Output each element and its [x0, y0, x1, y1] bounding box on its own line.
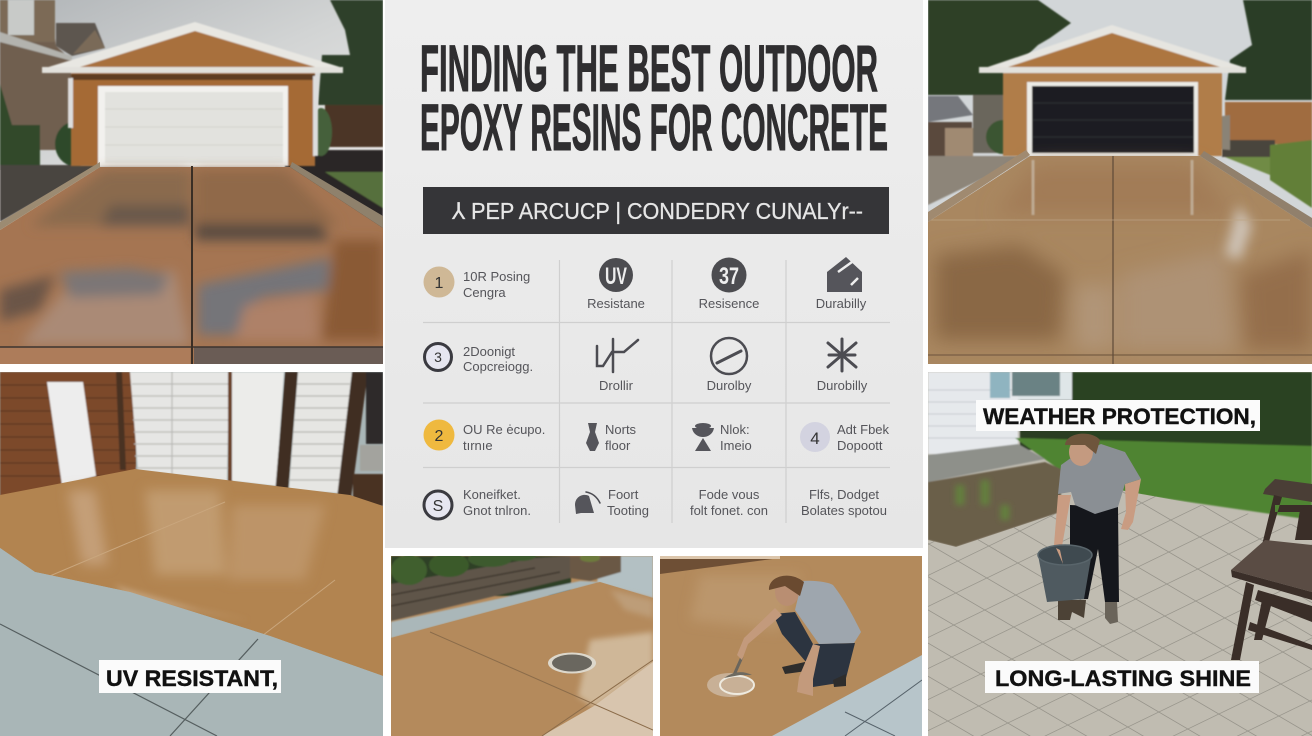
asterisk icon and caption: [817, 339, 868, 393]
photo: coated patio beside wooden wall, bottom left: [0, 372, 383, 736]
bucket: [1038, 545, 1092, 602]
UV icon and caption: Resistane: [587, 296, 645, 311]
lilac badge and caption: 4: [810, 429, 820, 448]
photo: garage with dark door, top right: [928, 0, 1312, 364]
label: long-lasting shine: LONG-LASTING SHINE: [995, 666, 1251, 691]
subtitle banner: [423, 187, 889, 234]
UV icon and caption: UV: [605, 263, 627, 290]
row 2 label: Copcreiogg.: [463, 359, 533, 374]
footing caption: folt fonet. con: [690, 503, 768, 518]
row 2: [424, 338, 868, 393]
chart line icon and caption: Drollir: [599, 378, 634, 393]
photo: garage with brown epoxy driveway, top left: [0, 0, 383, 364]
row 1 label: Cengra: [463, 285, 506, 300]
row 2 number badge: 3: [434, 349, 442, 365]
row 3 label: [463, 422, 545, 453]
first budget caption: Bolates spotou: [801, 503, 887, 518]
drain cover: [548, 652, 596, 674]
row 1 number badge: 1: [435, 275, 444, 292]
row 4 label: Koneifket.: [463, 487, 521, 502]
row 3 number badge: [424, 420, 454, 450]
first budget caption: Flfs, Dodget: [809, 487, 879, 502]
pedestal icon and caption: Nlok:: [720, 422, 750, 437]
row 2 number badge: [424, 344, 452, 370]
table and bench: [1231, 479, 1312, 660]
lilac badge and caption: [800, 422, 890, 453]
UV icon and caption: [587, 258, 645, 311]
footing caption: Fode vous: [699, 487, 760, 502]
pedestal icon and caption: [692, 422, 752, 453]
photo: worker applying coating: [660, 556, 922, 736]
label: UV resistant: [99, 660, 281, 693]
row 2 label: 2Doonigt: [463, 344, 515, 359]
row 1 label: [463, 269, 530, 300]
first budget caption: [801, 487, 887, 518]
wet tan floor: [0, 469, 383, 676]
row 4 label: [463, 487, 531, 518]
head icon and caption: Tooting: [607, 503, 649, 518]
photo: man with bucket on paved patio: [928, 372, 1312, 736]
prohibited trowel icon and caption: Durolby: [707, 378, 752, 393]
subtitle banner: ⅄ PEP ARCUCP | CONDEDRY CUNALYr--: [451, 198, 863, 224]
trowel and wet spot: [707, 657, 754, 697]
garage building: [979, 25, 1246, 156]
stone wall and hedge: [391, 551, 653, 638]
footing caption: [690, 487, 768, 518]
row 1: [424, 257, 867, 311]
row 3 label: OU Re ėcupo.: [463, 422, 545, 437]
grey concrete: [0, 548, 383, 736]
chart line icon and caption: [597, 339, 638, 393]
panel: central information card: [385, 0, 923, 548]
bottle icon and caption: Norts: [605, 422, 637, 437]
row 4 number badge: S: [433, 498, 443, 515]
row 2 label: [463, 344, 533, 374]
title: [420, 31, 888, 164]
37 icon and caption: Resisence: [699, 296, 759, 311]
photo: drain in tan coated patio: [391, 556, 653, 736]
row 1 number badge: [424, 266, 454, 298]
row 1 label: 10R Posing: [463, 269, 530, 284]
paving: [928, 490, 1312, 736]
wet driveway: [0, 162, 383, 364]
label: weather protection: WEATHER PROTECTION,: [983, 404, 1256, 429]
man: [1054, 434, 1141, 624]
row 3: [424, 420, 890, 453]
row 3 number badge: 2: [435, 428, 444, 445]
37 icon and caption: [699, 258, 759, 311]
wet driveway: [928, 150, 1312, 364]
37 icon and caption: 37: [719, 263, 739, 290]
head icon and caption: [575, 487, 649, 518]
row 4 number badge: [424, 491, 452, 519]
house durability icon and caption: [816, 257, 867, 311]
label: UV resistant: UV RESISTANT,: [106, 666, 278, 691]
wet floor: [391, 582, 653, 736]
lilac badge and caption: Dopoott: [837, 438, 883, 453]
bottle icon and caption: floor: [605, 438, 631, 453]
head icon and caption: Foort: [608, 487, 639, 502]
table grid lines: [423, 260, 890, 523]
row 4: [424, 487, 887, 519]
label: long-lasting shine: [985, 661, 1259, 693]
row 4 label: Gnot tnlron.: [463, 503, 531, 518]
bottle icon and caption: [586, 422, 637, 453]
lilac badge and caption: Adt Fbek: [837, 422, 890, 437]
person crouching: [737, 576, 861, 696]
pedestal icon and caption: Imeio: [720, 438, 752, 453]
row 3 label: tırnıe: [463, 438, 493, 453]
garage building: [42, 22, 343, 166]
asterisk icon and caption: Durobilly: [817, 378, 868, 393]
prohibited trowel icon and caption: [707, 338, 752, 393]
house durability icon and caption: Durabilly: [816, 296, 867, 311]
